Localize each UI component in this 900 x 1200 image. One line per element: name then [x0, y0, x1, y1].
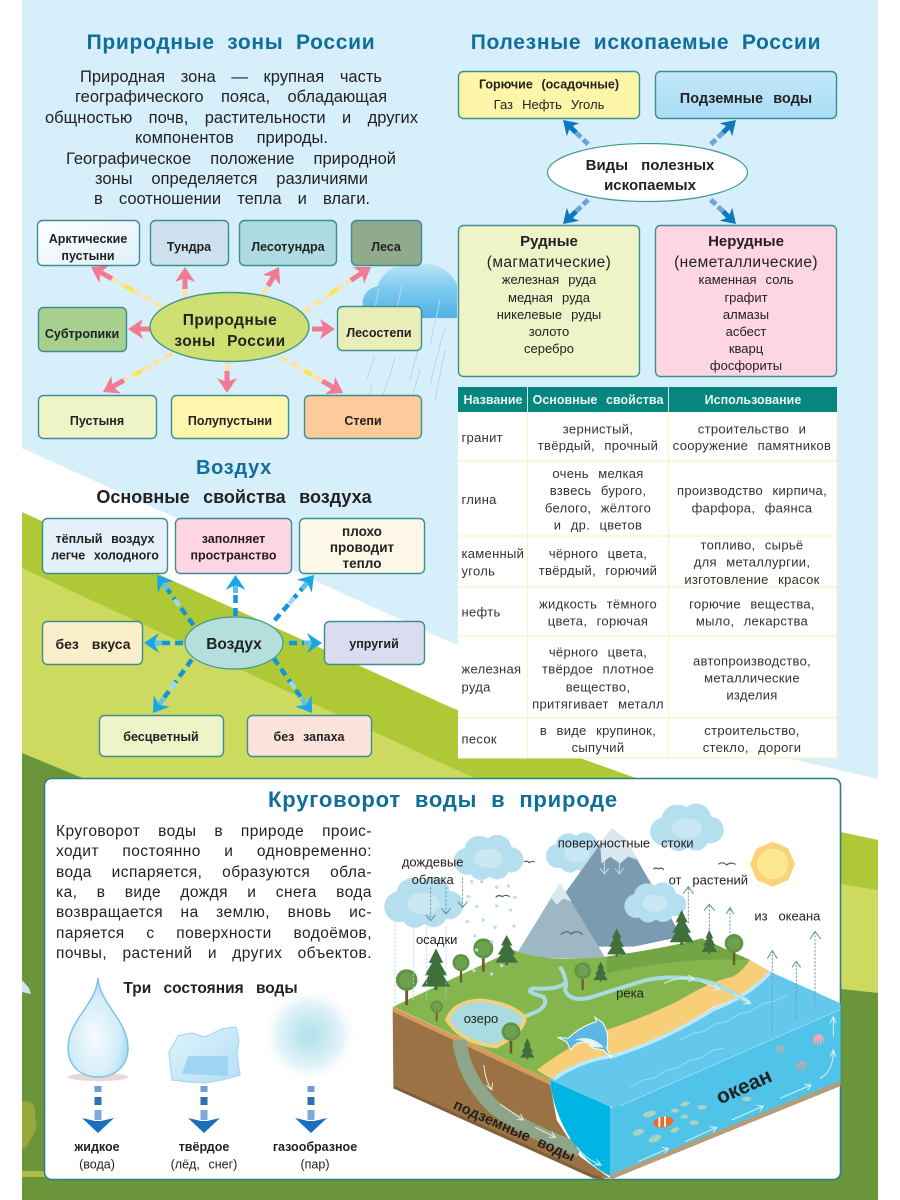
box: elastic: упругий [349, 637, 399, 651]
lake [445, 998, 527, 1048]
table rows: металлические [704, 670, 800, 686]
box: poor heat conductor: тепло [343, 556, 381, 571]
ellipse: natural zones centre [150, 292, 309, 362]
box: non-ore minerals: кварц [729, 341, 764, 356]
table rows: стекло, дороги [703, 740, 801, 755]
panel: water cycle [44, 778, 840, 1180]
box: fills space: пространство [190, 548, 277, 562]
icon: dolphin [557, 1017, 612, 1058]
text block: natural zone definition: Географическое положение природной [66, 150, 396, 168]
table rows: для металлургии, [694, 554, 810, 570]
box: poor heat conductor [300, 518, 424, 574]
ellipse: air centre: Воздух [206, 636, 262, 653]
table rows: твёрдый, прочный [538, 438, 658, 453]
table rows: глина [462, 492, 497, 507]
table rows: железная [462, 662, 521, 676]
table rows: и др. цветов [554, 518, 642, 532]
text block: water cycle description: почвы, растений и других объектов. [56, 945, 372, 962]
water cycle labels: от растений [669, 872, 748, 887]
ellipse: natural zones centre: зоны России [174, 333, 286, 350]
table rows: производство кирпича, [677, 483, 827, 498]
water cycle labels: река [616, 985, 645, 1000]
birds [496, 861, 736, 935]
table header: Основные свойства [533, 393, 664, 407]
box: forest tundra: Лесотундра [251, 240, 326, 254]
box: semi-desert [172, 396, 288, 438]
heading: water cycle: Круговорот воды в природе [268, 787, 618, 812]
text block: natural zone definition: в соотношении тепла и влаги. [94, 190, 370, 208]
box: tundra: Тундра [167, 240, 212, 254]
text block: natural zone definition: Природная зона — крупная часть [80, 68, 382, 86]
ellipse: types of minerals: Виды полезных [586, 157, 715, 174]
icon: ice cube [169, 1027, 240, 1083]
label: gas: (пар) [300, 1158, 330, 1172]
table rows: горючие вещества, [689, 596, 815, 612]
label: gas [273, 1140, 357, 1172]
table rows: песок [462, 732, 497, 746]
text block: water cycle description: паряется с поверхности водоёмов, [56, 925, 372, 942]
table rows: мыло, лекарства [696, 614, 809, 628]
table rows: зернистый, [563, 422, 633, 436]
table header: Использование [705, 393, 801, 407]
table rows: нефть [462, 604, 501, 620]
box: non-ore minerals: графит [724, 290, 768, 305]
text block: natural zone definition [45, 68, 418, 208]
table rows: чёрного цвета, [549, 546, 647, 561]
box: tundra [150, 220, 228, 266]
icon: rain cloud [363, 262, 457, 412]
box: combustible minerals: Газ Нефть Уголь [494, 97, 605, 112]
trees [396, 910, 743, 1059]
table rows: фарфора, фаянса [692, 500, 813, 516]
box: poor heat conductor: проводит [330, 540, 395, 555]
ellipse: types of minerals: ископаемых [604, 177, 697, 194]
ocean [550, 972, 841, 1180]
table rows: автопроизводство, [693, 654, 811, 668]
water cycle labels [402, 836, 821, 1165]
arrow: liquid [82, 1086, 114, 1133]
box: colourless: бесцветный [123, 730, 199, 744]
box: ore minerals [458, 226, 640, 376]
box: arctic deserts: пустыни [61, 249, 115, 263]
water cycle labels: дождевые [402, 855, 463, 870]
box: tasteless [42, 622, 142, 664]
box: poor heat conductor: плохо [342, 524, 382, 539]
box: forest tundra [240, 220, 336, 266]
table rows: сооружение памятников [673, 438, 831, 453]
table rows: строительство, [704, 723, 800, 738]
text block: water cycle description: вода испаряется, образуются обла- [56, 864, 372, 881]
box: warm air lighter [42, 518, 168, 574]
box: steppe: Степи [344, 414, 382, 428]
text block: water cycle description: Круговорот воды в природе проис- [56, 823, 372, 840]
arrow: solid [188, 1086, 220, 1133]
table header: Название [463, 393, 523, 407]
icon: water drop [68, 978, 128, 1081]
table rows: в виде крупинок, [540, 723, 656, 738]
jellyfish [776, 1034, 824, 1073]
sand and shoreline [537, 960, 770, 1080]
subheading: air properties: Основные свойства воздуха [96, 487, 373, 507]
water cycle labels: поверхностные стоки [558, 836, 694, 851]
box: non-ore minerals: (неметаллические) [674, 254, 818, 271]
table rows: сыпучий [572, 740, 624, 755]
arrows: rain and evaporation [395, 855, 821, 1030]
box: ore minerals: Рудные [520, 233, 578, 250]
table rows: топливо, сырьё [701, 538, 803, 552]
table rows: изготовление красок [684, 572, 820, 587]
label: solid: (лёд, снег) [171, 1158, 237, 1172]
box: odourless: без запаха [273, 730, 346, 744]
diagram: air arrows [144, 568, 322, 719]
subheading: three states of water: Три состояния воды [123, 980, 298, 997]
box: ore minerals: никелевые руды [497, 307, 601, 322]
icon: steam [262, 987, 358, 1083]
heading: natural zones: Природные зоны России [87, 31, 375, 54]
table rows: строительство и [698, 422, 806, 436]
table rows: изделия [726, 688, 778, 702]
table rows: руда [462, 680, 491, 694]
box: elastic [324, 622, 424, 664]
box: warm air lighter: тёплый воздух [56, 532, 155, 546]
box: arctic deserts [38, 220, 140, 266]
diagram: mineral arrows [557, 114, 742, 230]
box: groundwater [656, 72, 836, 118]
text block: water cycle description [56, 823, 372, 962]
text block: water cycle description: ка, в виде дождя и снега вода [56, 884, 372, 901]
icon: sun [750, 842, 795, 887]
text block: natural zone definition: географического пояса, обладающая [75, 88, 387, 106]
illustration: water cycle block [384, 804, 841, 1180]
soil [393, 1007, 610, 1180]
ellipse: natural zones centre: Природные [183, 312, 277, 329]
fish [632, 1097, 751, 1144]
label: solid: твёрдое [179, 1140, 229, 1154]
river [523, 967, 750, 1017]
water cycle labels: озеро [464, 1011, 498, 1026]
box: groundwater: Подземные воды [680, 91, 812, 107]
rain dots [466, 880, 517, 976]
label: gas: газообразное [273, 1140, 357, 1154]
box: tasteless: без вкуса [55, 636, 131, 652]
box: odourless [248, 716, 372, 756]
text block: natural zone definition: зоны определяется различиями [95, 170, 368, 188]
ellipse: air centre [185, 617, 283, 669]
box: ore minerals: медная руда [508, 290, 591, 305]
box: non-ore minerals: каменная соль [698, 272, 794, 287]
clouds [384, 804, 724, 928]
table rows: уголь [462, 564, 495, 578]
heading: minerals: Полезные ископаемые России [471, 31, 821, 54]
box: combustible minerals: Горючие (осадочные) [479, 78, 619, 92]
text block: natural zone definition: общностью почв, растительности и других [45, 109, 418, 127]
land surface [393, 938, 770, 1080]
table: rocks and minerals [458, 387, 837, 758]
water cycle labels: подземные воды [451, 1097, 577, 1165]
table rows: каменный [462, 546, 524, 561]
label: liquid: (вода) [79, 1158, 115, 1172]
table header [463, 393, 801, 407]
box: non-ore minerals: асбест [726, 324, 766, 339]
label: liquid: жидкое [73, 1140, 120, 1154]
table rows: взвесь бурого, [550, 483, 646, 498]
box: non-ore minerals: фосфориты [710, 358, 782, 373]
water cycle labels: облака [412, 872, 454, 887]
box: warm air lighter: легче холодного [51, 548, 159, 562]
table rows: белого, жёлтого [545, 500, 651, 516]
box: forest steppe [338, 306, 422, 350]
label: liquid [73, 1140, 120, 1172]
box: subtropics: Субтропики [45, 327, 119, 341]
box: non-ore minerals: алмазы [723, 307, 769, 322]
table rows [462, 422, 831, 755]
table rows: гранит [462, 430, 503, 445]
table rows: вещество, [566, 680, 630, 694]
table rows: чёрного цвета, [549, 644, 647, 660]
text block: water cycle description: ходит постоянно и одновременно: [56, 843, 372, 860]
table rows: твёрдое плотное [542, 662, 654, 676]
box: arctic deserts: Арктические [49, 232, 127, 246]
box: combustible minerals [458, 72, 640, 118]
table rows: твёрдый, горючий [539, 563, 657, 578]
mountains [515, 828, 686, 960]
diagram: natural zones arrows [86, 258, 377, 402]
white flow arrows [484, 975, 836, 1165]
text block: water cycle description: возвращается на землю, вновь ис- [56, 904, 372, 921]
box: ore minerals: (магматические) [487, 254, 611, 271]
box: fills space: заполняет [202, 532, 265, 546]
box: forests: Леса [371, 240, 402, 254]
heading: air: Воздух [196, 457, 272, 479]
box: colourless [100, 716, 224, 756]
box: forest steppe: Лесостепи [346, 326, 412, 340]
box: desert [38, 396, 156, 438]
table rows: очень мелкая [552, 466, 644, 481]
box: non-ore minerals [656, 226, 836, 376]
box: ore minerals: серебро [524, 341, 574, 356]
water cycle labels: океан [713, 1064, 775, 1109]
water cycle labels: из океана [754, 909, 821, 924]
box: forests [352, 220, 422, 266]
box: ore minerals: золото [529, 324, 569, 339]
text block: natural zone definition: компонентов природы. [135, 129, 328, 147]
table rows: цвета, горючая [548, 614, 648, 628]
box: desert: Пустыня [70, 414, 124, 428]
box: steppe [304, 396, 422, 438]
table rows: притягивает металл [532, 696, 664, 712]
box: ore minerals: железная руда [502, 272, 597, 287]
box: semi-desert: Полупустыни [188, 414, 272, 428]
arrow: gas [295, 1086, 327, 1133]
label: solid [171, 1140, 237, 1172]
water cycle labels: осадки [416, 932, 457, 947]
box: fills space [176, 518, 292, 574]
box: non-ore minerals: Нерудные [708, 233, 784, 250]
ellipse: types of minerals [548, 144, 748, 202]
table rows: жидкость тёмного [539, 596, 657, 612]
box: subtropics [38, 308, 126, 352]
